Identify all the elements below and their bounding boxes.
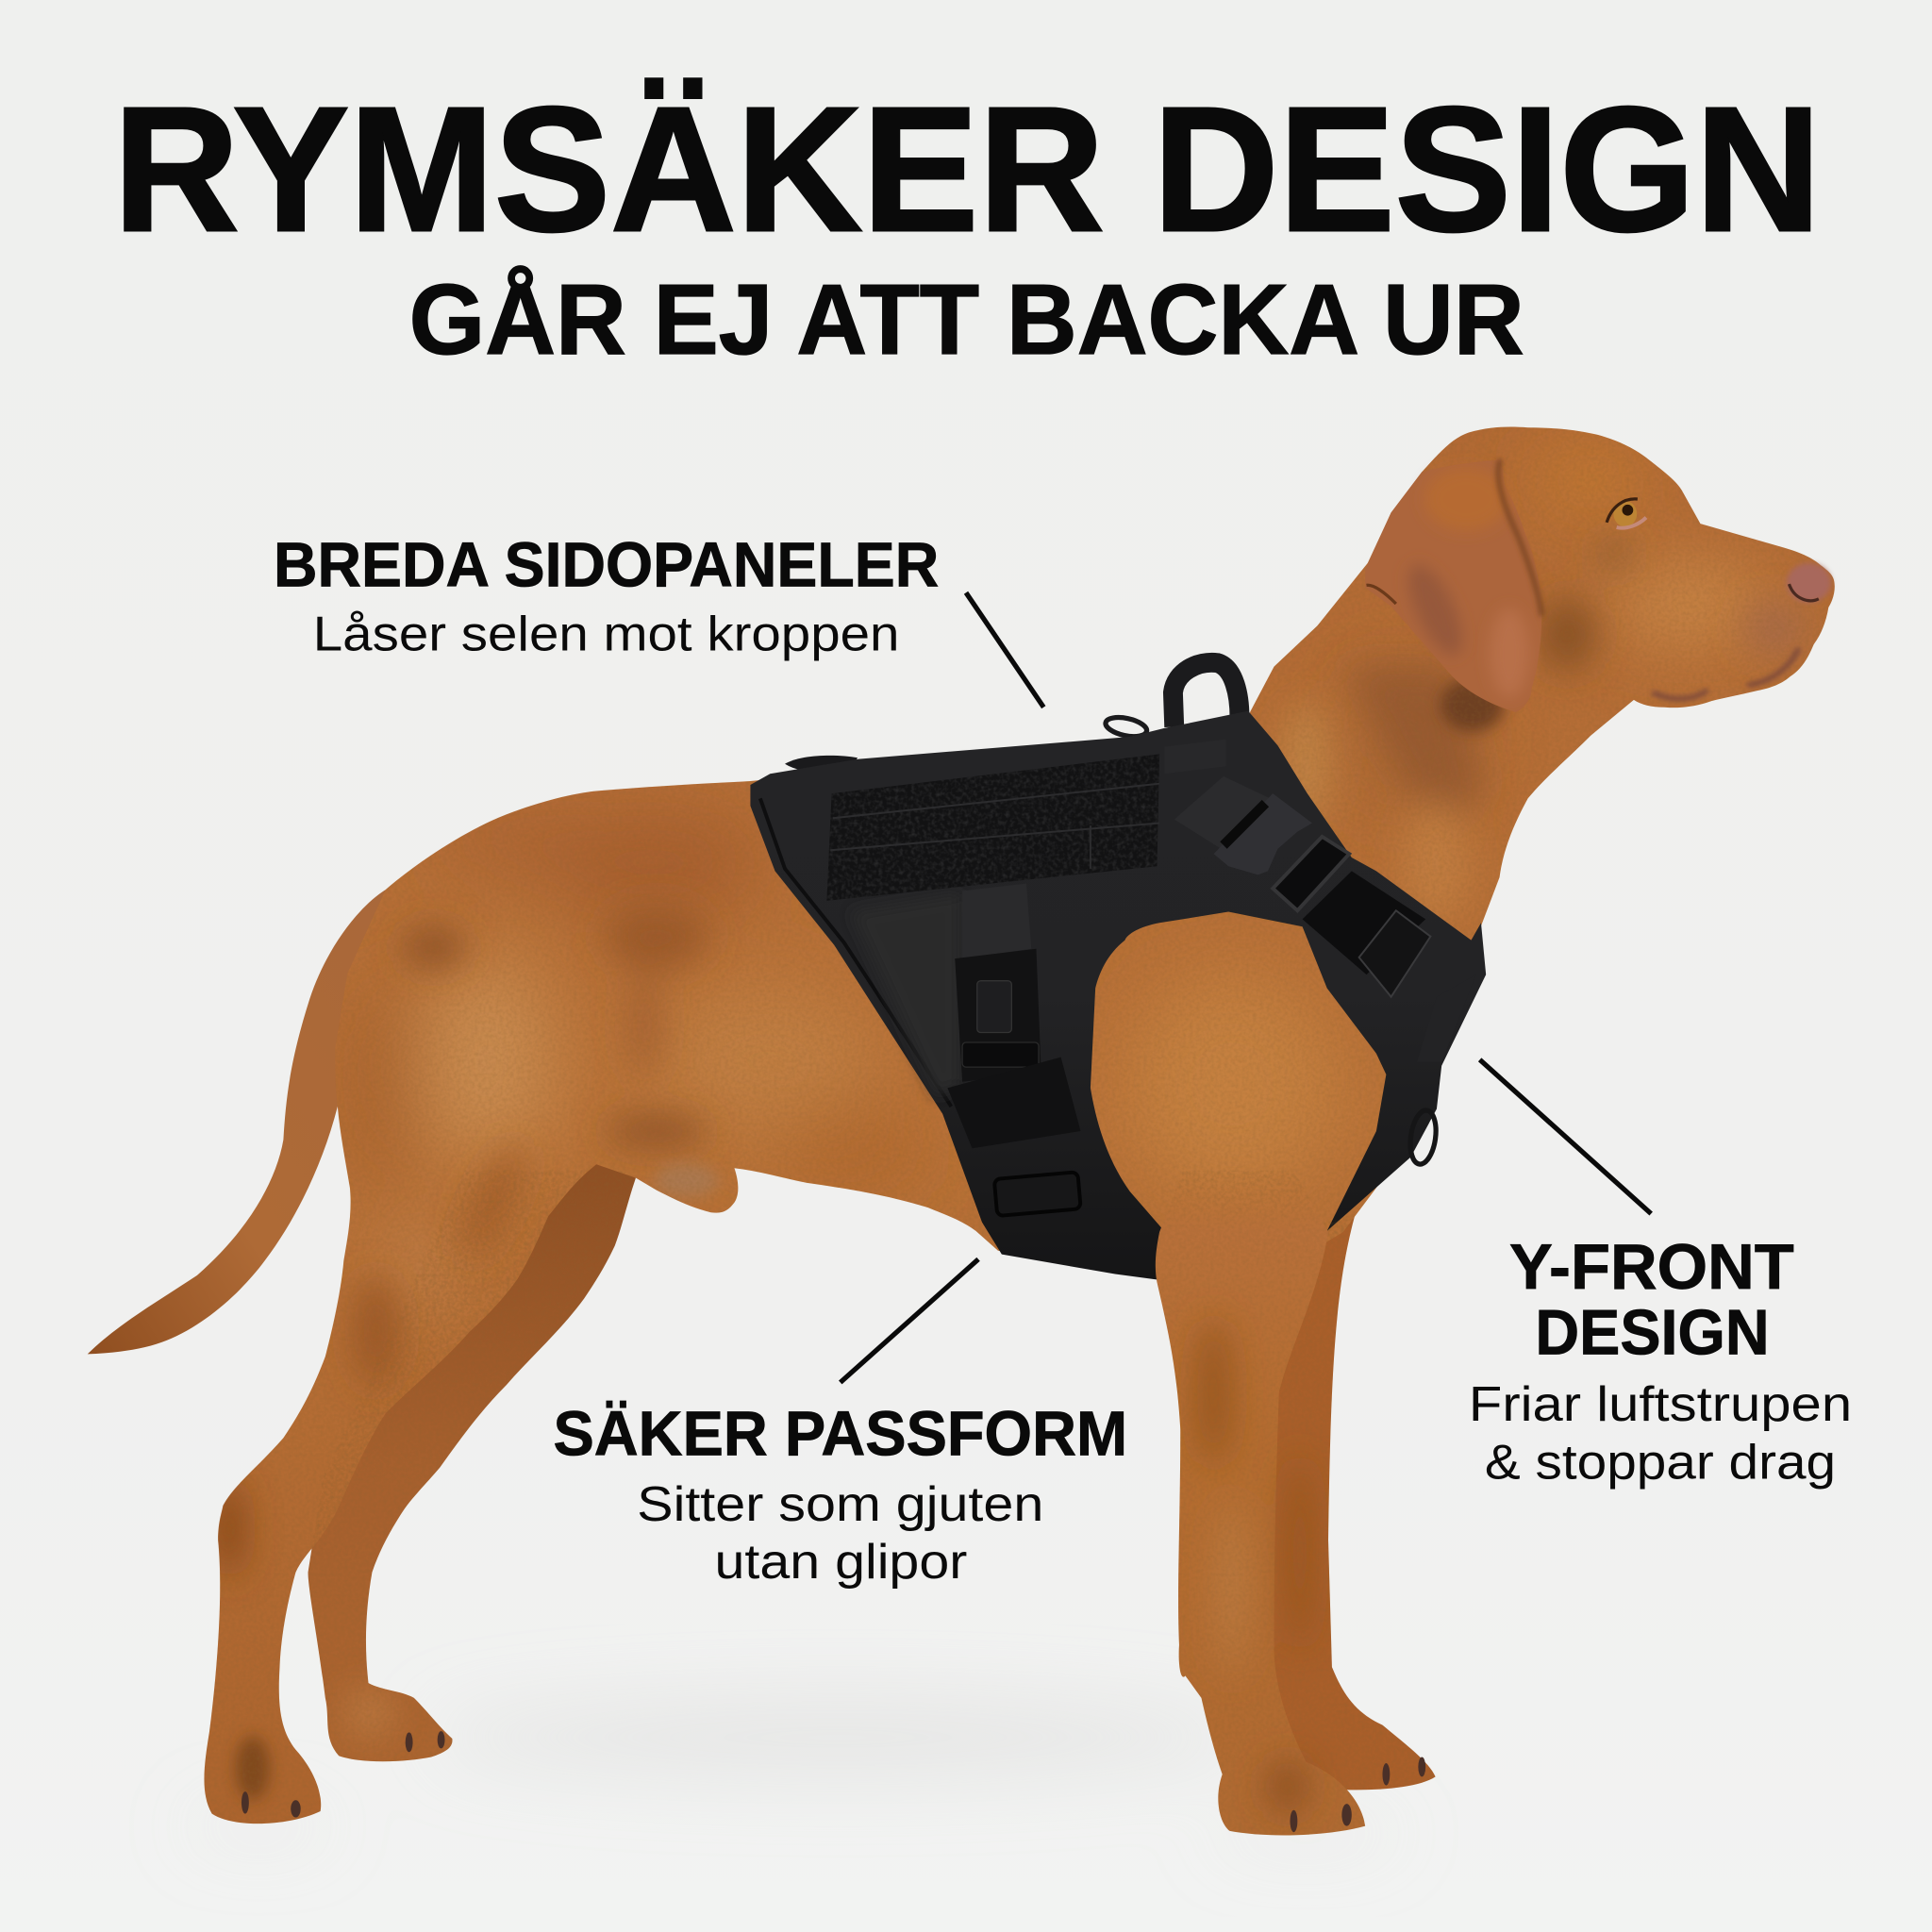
callout heading: Y-FRONT: [1509, 1232, 1794, 1303]
callout: y-front design: [1469, 1059, 1852, 1490]
velcro panel: [826, 755, 1159, 901]
near front leg: [1156, 1171, 1365, 1835]
subtitle: GÅR EJ ATT BACKA UR: [409, 264, 1524, 375]
nails: [242, 1731, 1425, 1832]
callout: breda sidopaneler: [274, 531, 1043, 708]
floor shadow: [185, 1698, 1405, 1843]
panel piping: [760, 798, 951, 1107]
callout description: Låser selen mot kroppen: [313, 608, 899, 662]
belly strap: [947, 1058, 1080, 1148]
harness: [750, 662, 1486, 1281]
far hind leg: [308, 1109, 636, 1761]
ear shading: [1366, 459, 1541, 697]
callout heading line 2: DESIGN: [1535, 1297, 1770, 1368]
chest slider: [1359, 910, 1430, 997]
far front leg: [1269, 1214, 1436, 1790]
fur shading: [214, 446, 1805, 1800]
d-ring top: [1104, 714, 1148, 740]
callout description line 2: utan glipor: [715, 1535, 967, 1590]
tail: [88, 890, 386, 1354]
d-ring back: [785, 756, 858, 773]
fur texture: [208, 427, 1824, 1787]
pointer line: [966, 592, 1043, 708]
title: RYMSÄKER DESIGN: [113, 70, 1821, 268]
slider: [994, 1172, 1081, 1216]
shoulder panel highlight: [850, 893, 961, 1096]
top webbing tab: [1164, 740, 1226, 774]
callout description: Sitter som gjuten: [637, 1477, 1043, 1532]
callout heading: BREDA SIDOPANELER: [274, 531, 939, 601]
leg shading: [345, 1319, 1312, 1814]
handle: [1173, 662, 1240, 727]
leg fur texture: [295, 1171, 1454, 1848]
cobra buckle metal: [1214, 793, 1349, 910]
cobra buckle webbing: [1174, 776, 1273, 849]
dog illustration: [74, 419, 1848, 1836]
vertical strap: [962, 883, 1031, 958]
d-ring front: [1407, 1108, 1440, 1166]
callout: säker passform: [553, 1259, 1127, 1590]
body, neck, head and near hind leg: [204, 427, 1835, 1824]
callout description line 2: & stoppar drag: [1485, 1435, 1836, 1490]
callout description: Friar luftstrupen: [1469, 1377, 1852, 1432]
pointer line: [1480, 1059, 1651, 1214]
mouth: [1653, 648, 1799, 699]
front velcro: [1417, 974, 1476, 1062]
nose: [1787, 563, 1831, 603]
pointer line: [841, 1259, 978, 1382]
chest webbing: [1303, 871, 1425, 974]
callout heading: SÄKER PASSFORM: [553, 1400, 1127, 1470]
eye: [1607, 499, 1646, 528]
ear: [1365, 459, 1541, 712]
harness body: [750, 711, 1486, 1281]
side release buckle: [955, 949, 1041, 1082]
